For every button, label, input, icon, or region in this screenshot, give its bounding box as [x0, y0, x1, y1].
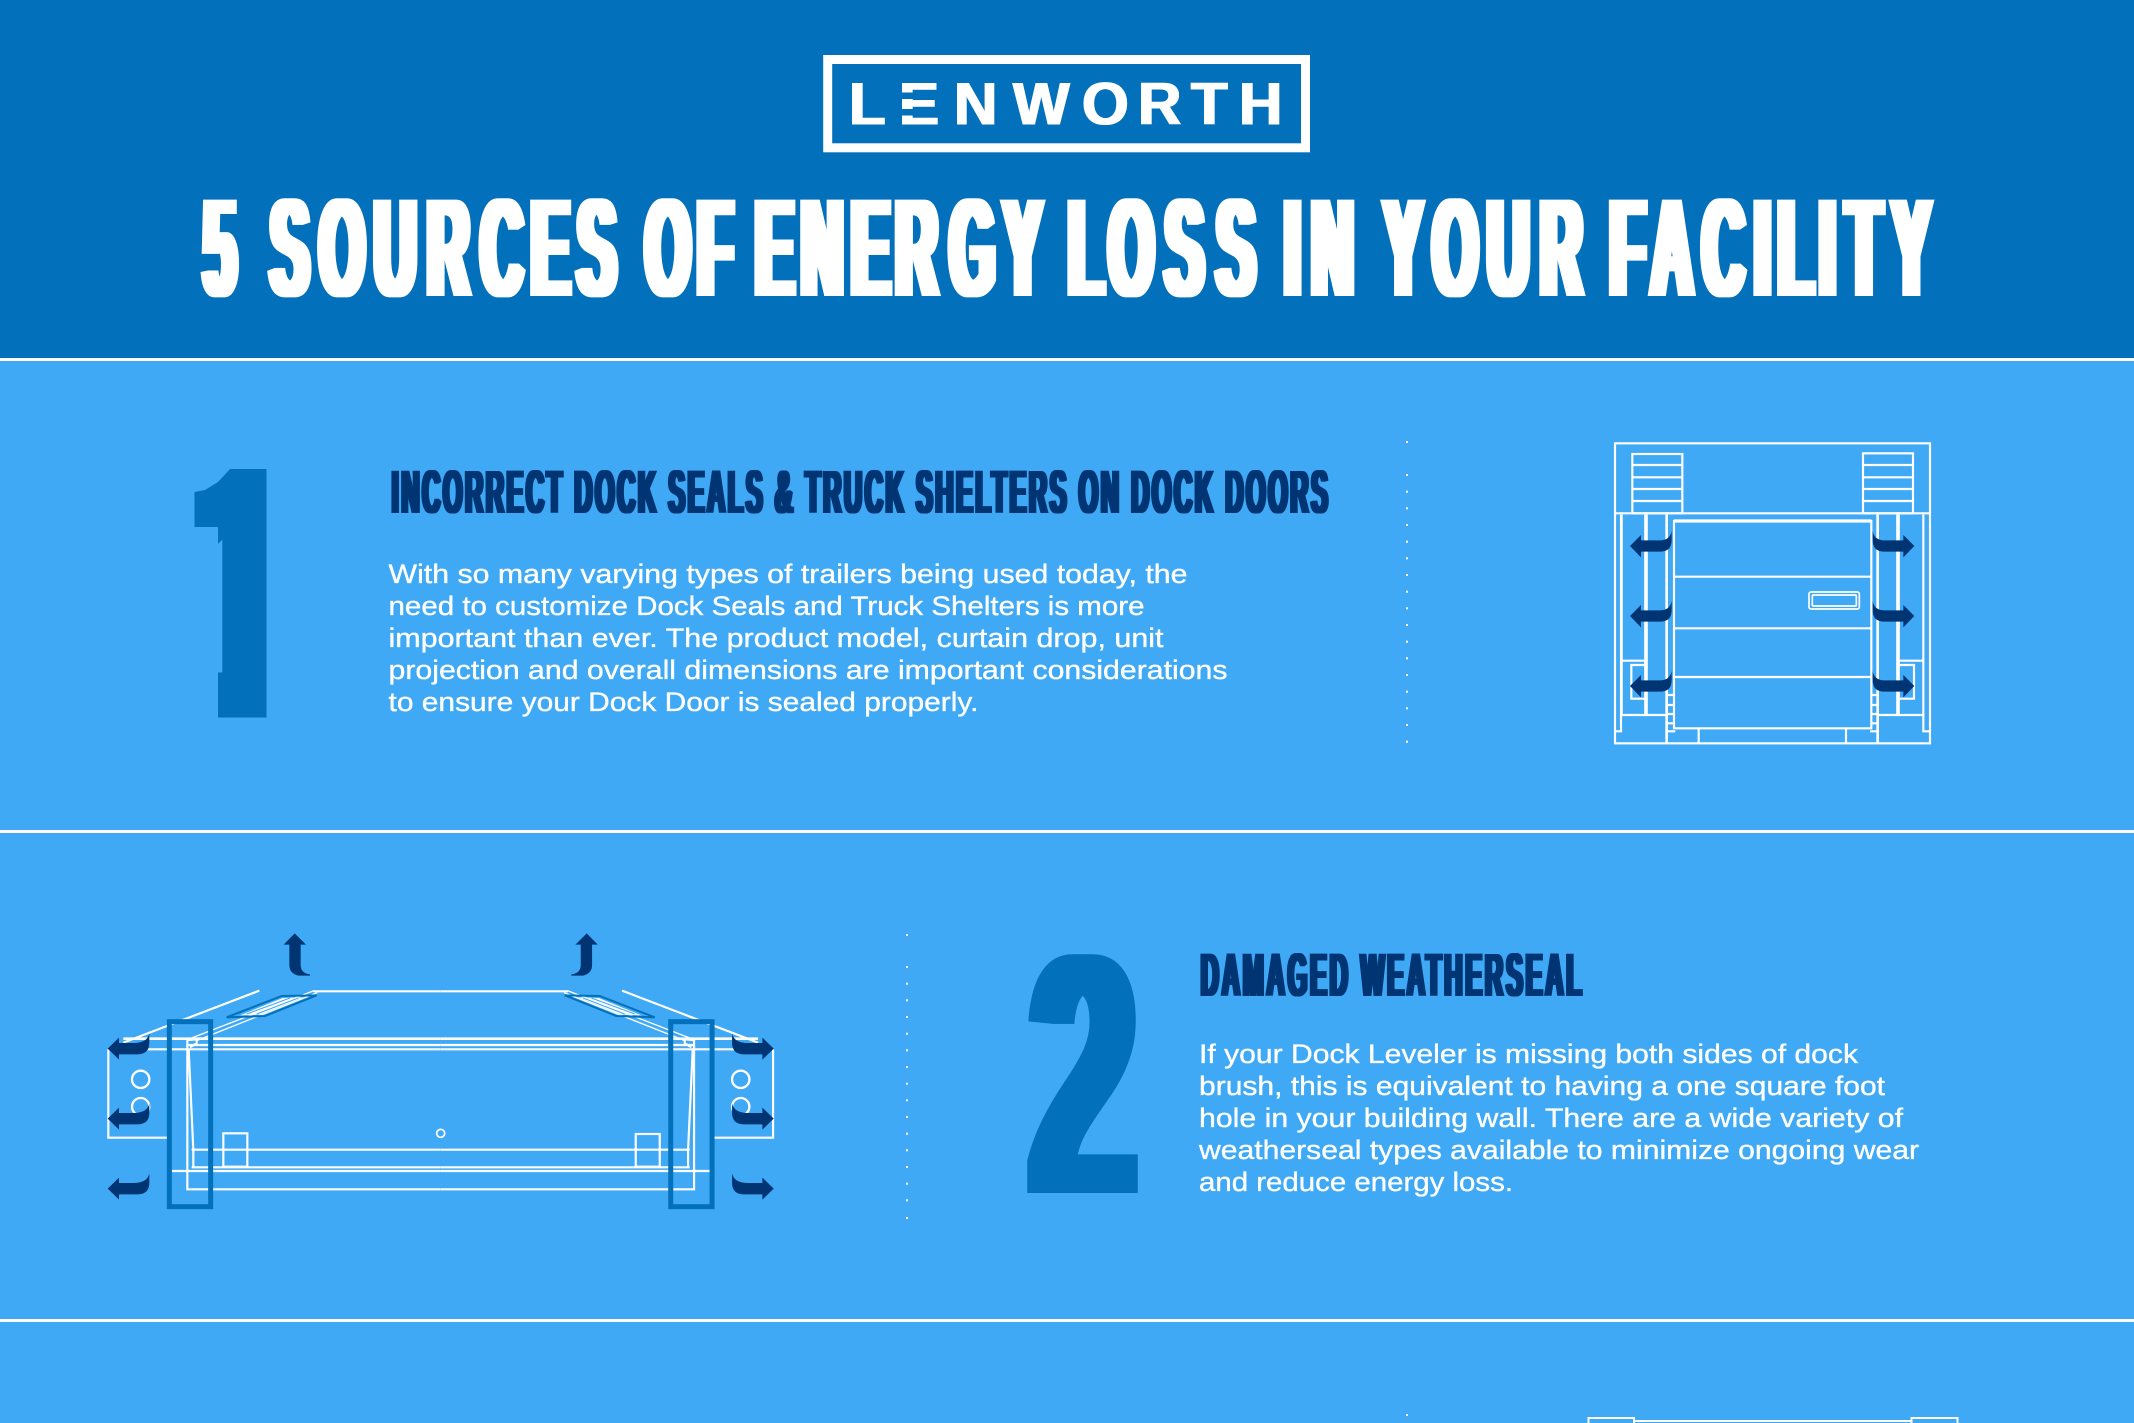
logo: Lenworth	[828, 60, 1306, 148]
illustration: section 3 top edge	[1588, 1418, 1958, 1423]
text block: section 2 body: hole in your building wall. There are a wide variety of	[1199, 1103, 1904, 1133]
title: 5 SOURCES OF ENERGY LOSS IN YOUR FACILITY	[204, 169, 1930, 326]
header band	[0, 0, 2134, 358]
leveler left half	[108, 933, 441, 1207]
door panels	[1674, 521, 1871, 728]
panel: section 2 weatherseal	[1031, 884, 1919, 1266]
text block: section 1 body: important than ever. The product model, curtain drop, unit	[388, 623, 1164, 653]
leveler right half	[441, 933, 774, 1207]
heading: incorrect dock seals: INCORRECT DOCK SEALS & TRUCK SHELTERS ON DOCK DOORS	[392, 458, 1328, 526]
door handle	[1809, 592, 1859, 609]
heading: damaged weatherseal: DAMAGED WEATHERSEAL	[1201, 941, 1582, 1009]
text block: section 2 body: If your Dock Leveler is missing both sides of dock	[1199, 1039, 1859, 1069]
leveler centre bolt	[437, 1129, 445, 1137]
section 3 divider dot	[1406, 1414, 1408, 1416]
arrows: air leaking from left side	[1630, 531, 1672, 697]
text block: section 1 body: projection and overall dimensions are important considerations	[388, 655, 1228, 685]
text block: section 2 body: and reduce energy loss.	[1199, 1167, 1513, 1197]
dotted divider: section 1	[1406, 441, 1408, 743]
illustration: dock leveler with damaged weatherseal	[108, 933, 774, 1207]
text block: section 1 body: need to customize Dock Seals and Truck Shelters is more	[388, 591, 1144, 621]
illustration: dock door with air leak arrows	[1615, 443, 1930, 743]
text block: section 1 body: to ensure your Dock Door is sealed properly.	[388, 687, 978, 717]
text block: section 1 body	[388, 559, 1228, 717]
logo: Lenworth: LENWORTH	[849, 71, 1282, 138]
dotted divider: section 2	[906, 934, 908, 1219]
text block: section 1 body: With so many varying types of trailers being used today, the	[388, 559, 1188, 589]
text block: section 2 body	[1198, 1039, 1919, 1197]
number 2: 2	[1031, 884, 1135, 1266]
number 1: 1	[178, 393, 307, 793]
text block: section 2 body: brush, this is equivalent to having a one square foot	[1199, 1071, 1886, 1101]
arrows: air leaking from right side	[1873, 531, 1914, 697]
panel: section 1 dock seals	[194, 469, 1329, 718]
text block: section 2 body: weatherseal types available to minimize ongoing wear	[1198, 1135, 1919, 1165]
